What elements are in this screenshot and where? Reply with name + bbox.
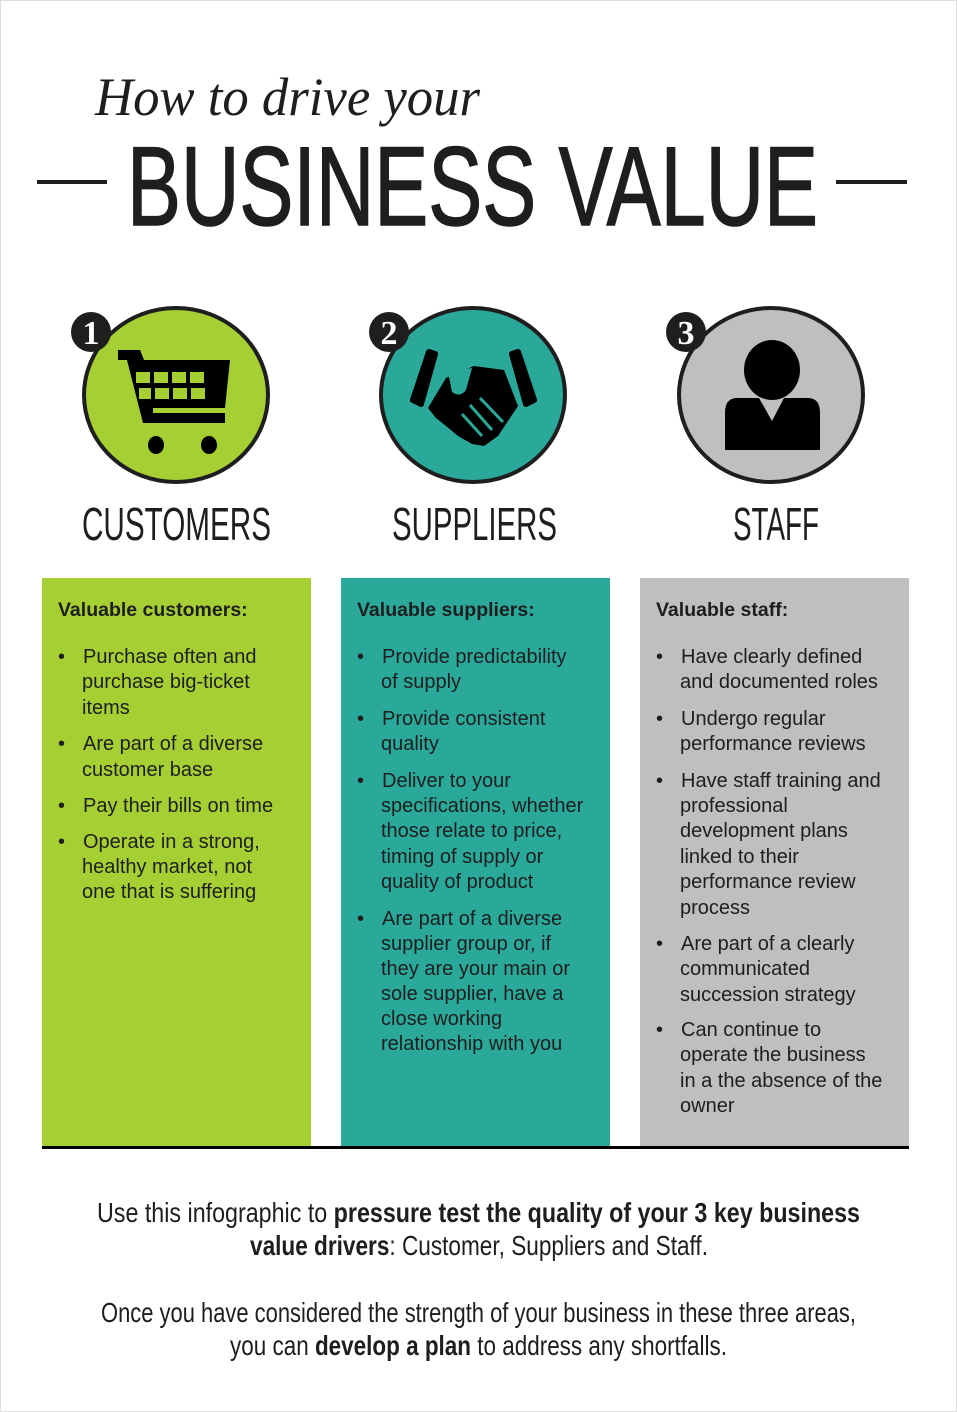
panel: staff: professional xyxy=(680,795,788,817)
panel: staff: development plans xyxy=(680,820,848,842)
panel: customers: healthy market, not xyxy=(82,856,253,878)
panel: suppliers: quality of product xyxy=(381,871,534,893)
panel: customers: Operate in a strong, xyxy=(83,831,260,853)
label: customers: CUSTOMERS xyxy=(82,498,271,550)
panel: suppliers: • xyxy=(357,908,364,930)
footer text xyxy=(97,1197,860,1361)
icon: staff xyxy=(679,308,863,482)
panel: staff: succession strategy xyxy=(680,984,856,1006)
panel: suppliers: quality xyxy=(381,733,439,755)
panel: staff: process xyxy=(680,897,750,919)
panel: staff: in a the absence of the xyxy=(680,1070,882,1092)
panel: customers: items xyxy=(82,697,130,719)
panel: staff xyxy=(640,578,909,1147)
panel: staff: • xyxy=(656,770,663,792)
panel: suppliers: Provide predictability xyxy=(382,646,567,668)
panel: staff: operate the business xyxy=(680,1044,866,1066)
panel: suppliers: • xyxy=(357,708,364,730)
panel: suppliers: Are part of a diverse xyxy=(382,908,562,930)
panel: suppliers: Deliver to your xyxy=(382,770,511,792)
panel: staff: Valuable staff: xyxy=(656,599,788,621)
badge 3 xyxy=(666,312,706,352)
panel: staff: Undergo regular xyxy=(681,708,826,730)
panel: staff: Can continue to xyxy=(681,1019,821,1041)
panel: customers: • xyxy=(58,795,65,817)
panel: staff: • xyxy=(656,708,663,730)
badge 1 xyxy=(71,312,111,352)
badge 2: 2 xyxy=(380,315,398,352)
panel: suppliers: of supply xyxy=(381,671,461,693)
panel: staff: Are part of a clearly xyxy=(681,933,854,955)
panel: staff: • xyxy=(656,1019,663,1041)
label: staff: STAFF xyxy=(733,498,819,550)
footer text: value drivers: Customer, Suppliers and Staff. xyxy=(250,1230,708,1261)
panel: staff: • xyxy=(656,646,663,668)
panel: suppliers: • xyxy=(357,646,364,668)
panel: suppliers: those relate to price, xyxy=(381,820,562,842)
panel: suppliers: timing of supply or xyxy=(381,846,544,868)
panel: suppliers: specifications, whether xyxy=(381,795,584,817)
panel: customers: purchase big-ticket xyxy=(82,671,250,693)
badge 2 xyxy=(369,312,409,352)
label: suppliers: SUPPLIERS xyxy=(392,498,557,550)
icon: suppliers xyxy=(381,308,565,482)
panel: staff: and documented roles xyxy=(680,671,878,693)
panel: suppliers xyxy=(341,578,610,1147)
icon: customers xyxy=(84,308,268,482)
panel: staff: Have staff training and xyxy=(681,770,881,792)
panel: customers: • xyxy=(58,831,65,853)
panel: customers: Are part of a diverse xyxy=(83,733,263,755)
panel: customers: customer base xyxy=(82,759,213,781)
panel: staff: linked to their xyxy=(680,846,799,868)
panel: suppliers: sole supplier, have a xyxy=(381,983,564,1005)
panel: staff: performance reviews xyxy=(680,733,866,755)
panel: suppliers: Valuable suppliers: xyxy=(357,599,535,621)
panel: customers: Purchase often and xyxy=(83,646,256,668)
title: subtitle: How to drive your xyxy=(94,67,481,127)
panel: suppliers: Provide consistent xyxy=(382,708,546,730)
panel: staff: communicated xyxy=(680,958,810,980)
panel: suppliers: close working xyxy=(381,1008,502,1030)
panel: customers: Pay their bills on time xyxy=(83,795,273,817)
panel: customers xyxy=(42,578,311,1147)
panel: staff: owner xyxy=(680,1095,735,1117)
footer text: Use this infographic to pressure test the quality of your 3 key business xyxy=(97,1197,860,1228)
footer text: you can develop a plan to address any shortfalls. xyxy=(230,1330,727,1361)
panel: staff: performance review xyxy=(680,871,856,893)
panel: suppliers: supplier group or, if xyxy=(381,933,552,955)
panel: suppliers: they are your main or xyxy=(381,958,570,980)
panel: customers: one that is suffering xyxy=(82,881,256,903)
panel: suppliers: • xyxy=(357,770,364,792)
badge 1: 1 xyxy=(82,315,100,352)
panel: staff: • xyxy=(656,933,663,955)
panel: suppliers: relationship with you xyxy=(381,1033,562,1055)
panel: customers: • xyxy=(58,733,65,755)
panel: staff: Have clearly defined xyxy=(681,646,862,668)
panel: customers: Valuable customers: xyxy=(58,599,248,621)
panel: customers: • xyxy=(58,646,65,668)
badge 3: 3 xyxy=(678,315,694,352)
